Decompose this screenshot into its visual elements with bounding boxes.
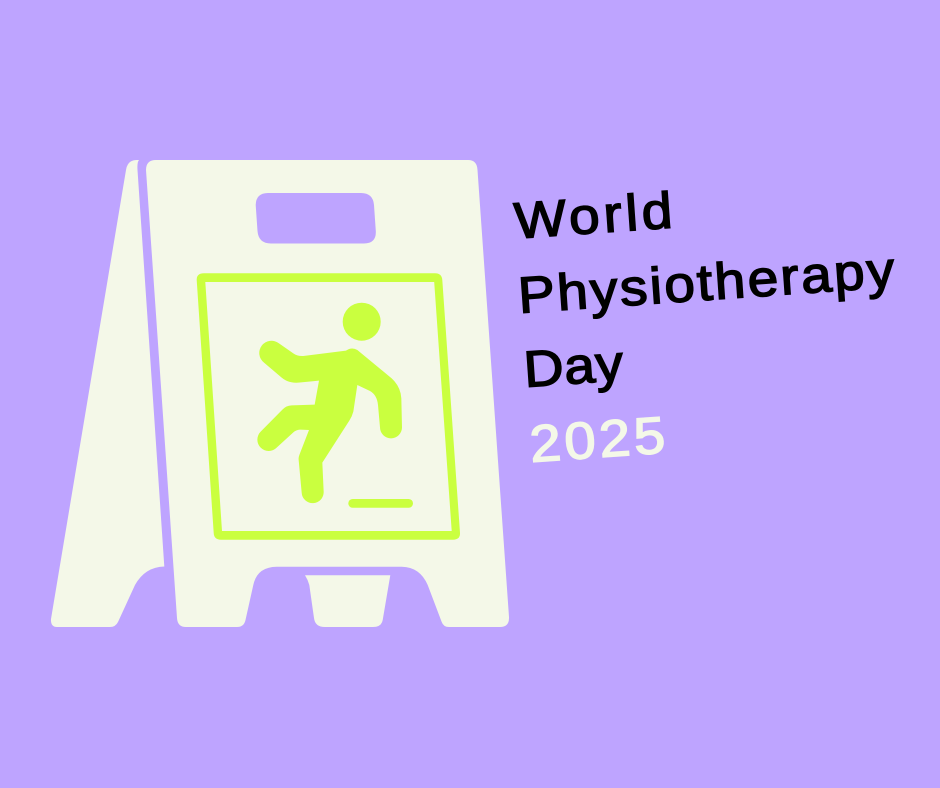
person head xyxy=(343,303,381,341)
warning frame xyxy=(197,273,460,540)
title: World: World xyxy=(512,182,674,250)
floor line xyxy=(348,499,413,508)
icon: slipping person xyxy=(257,303,413,508)
year: 2025: 2025 xyxy=(528,407,667,474)
sign front panel with handle cut-out xyxy=(146,160,509,627)
title: Physiotherapy: Physiotherapy xyxy=(516,242,897,325)
title: Day: Day xyxy=(522,335,625,399)
sign back panel xyxy=(51,160,164,627)
person body xyxy=(257,341,402,503)
illustration: wet floor sign xyxy=(51,160,509,627)
sign lower centre leg xyxy=(305,575,390,627)
